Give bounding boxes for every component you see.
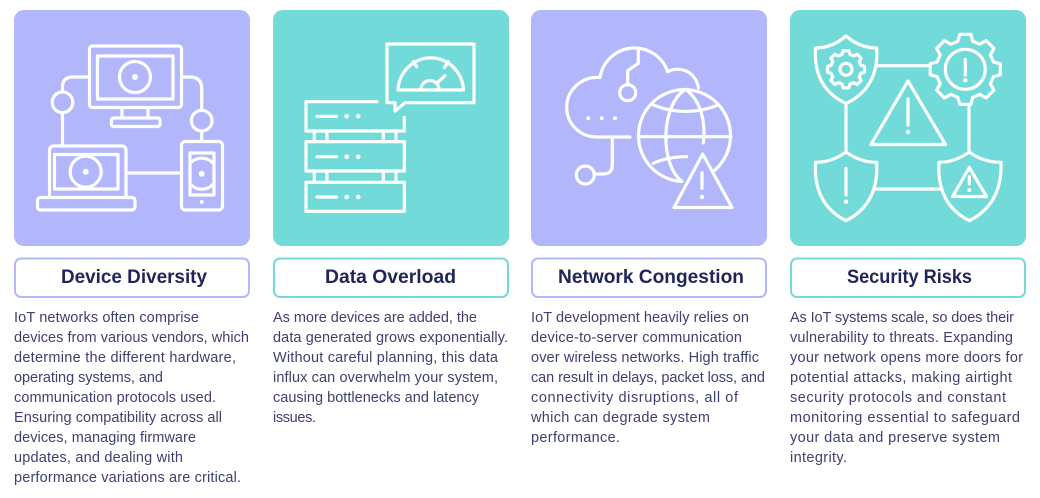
heading: device diversity	[15, 258, 249, 297]
text: device diversity description: updates, and dealing with	[14, 450, 183, 466]
text: device diversity description: communication protocols used.	[14, 390, 216, 406]
text: network congestion description: which can degrade system	[530, 410, 710, 426]
text: data overload description: influx can overwhelm your system,	[273, 370, 498, 386]
heading: security risks: Security Risks	[847, 267, 972, 288]
heading: data overload	[274, 258, 508, 297]
text: device diversity description	[14, 310, 249, 486]
text: network congestion description: connectivity disruptions, all of	[531, 390, 739, 406]
icon panel: device diversity	[14, 10, 250, 246]
icon: cloud, globe and warning	[567, 48, 732, 208]
text: network congestion description: performance.	[531, 430, 620, 446]
text: security risks description: As IoT systems scale, so does their	[790, 310, 1014, 326]
text: network congestion description	[530, 310, 765, 446]
panel: security risks	[790, 10, 1026, 466]
panel: data overload	[273, 10, 509, 426]
icon panel: data overload	[273, 10, 509, 246]
text: data overload description: causing bottlenecks and latency	[273, 390, 480, 406]
icon: shields, gear and warnings	[815, 34, 1001, 221]
text: security risks description: integrity.	[790, 450, 847, 466]
text: device diversity description: determine the different hardware,	[14, 350, 236, 366]
text: network congestion description: over wireless networks. High traffic	[531, 350, 759, 366]
heading: network congestion	[532, 258, 766, 297]
text: security risks description: security protocols and constant	[790, 390, 1006, 406]
text: security risks description	[790, 310, 1023, 466]
text: security risks description: potential attacks, making airtight	[790, 370, 1012, 386]
icon: server stack with gauge	[306, 44, 474, 211]
text: device diversity description: operating systems, and	[14, 370, 163, 386]
panel: network congestion	[530, 10, 767, 446]
icon panel: network congestion	[531, 10, 767, 246]
text: security risks description: monitoring essential to safeguard	[790, 410, 1020, 426]
text: device diversity description: IoT networks often comprise	[14, 310, 199, 326]
text: device diversity description: devices from various vendors, which	[14, 330, 249, 346]
text: network congestion description: IoT development heavily relies on	[531, 310, 749, 326]
text: security risks description: vulnerability to threats. Expanding	[790, 330, 1013, 346]
icon panel: security risks	[790, 10, 1026, 246]
text: data overload description: issues.	[273, 410, 316, 426]
text: device diversity description: devices, managing firmware	[14, 430, 196, 446]
heading: network congestion: Network Congestion	[558, 267, 744, 288]
text: device diversity description: Ensuring compatibility across all	[14, 410, 222, 426]
text: data overload description: data generated grows exponentially.	[273, 330, 508, 346]
text: data overload description: Without careful planning, this data	[273, 350, 499, 366]
text: security risks description: your data and preserve system	[790, 430, 1000, 446]
panel: device diversity	[14, 10, 250, 486]
heading: device diversity: Device Diversity	[61, 267, 207, 288]
heading: security risks	[791, 258, 1025, 297]
text: data overload description: As more devices are added, the	[273, 310, 477, 326]
heading: data overload: Data Overload	[325, 267, 456, 288]
text: network congestion description: device-to-server communication	[531, 330, 742, 346]
text: network congestion description: can result in delays, packet loss, and	[531, 370, 765, 386]
text: security risks description: your network opens more doors for	[790, 350, 1023, 366]
text: data overload description	[273, 310, 508, 426]
text: device diversity description: performance variations are critical.	[14, 470, 241, 486]
icon: connected devices	[38, 46, 222, 210]
